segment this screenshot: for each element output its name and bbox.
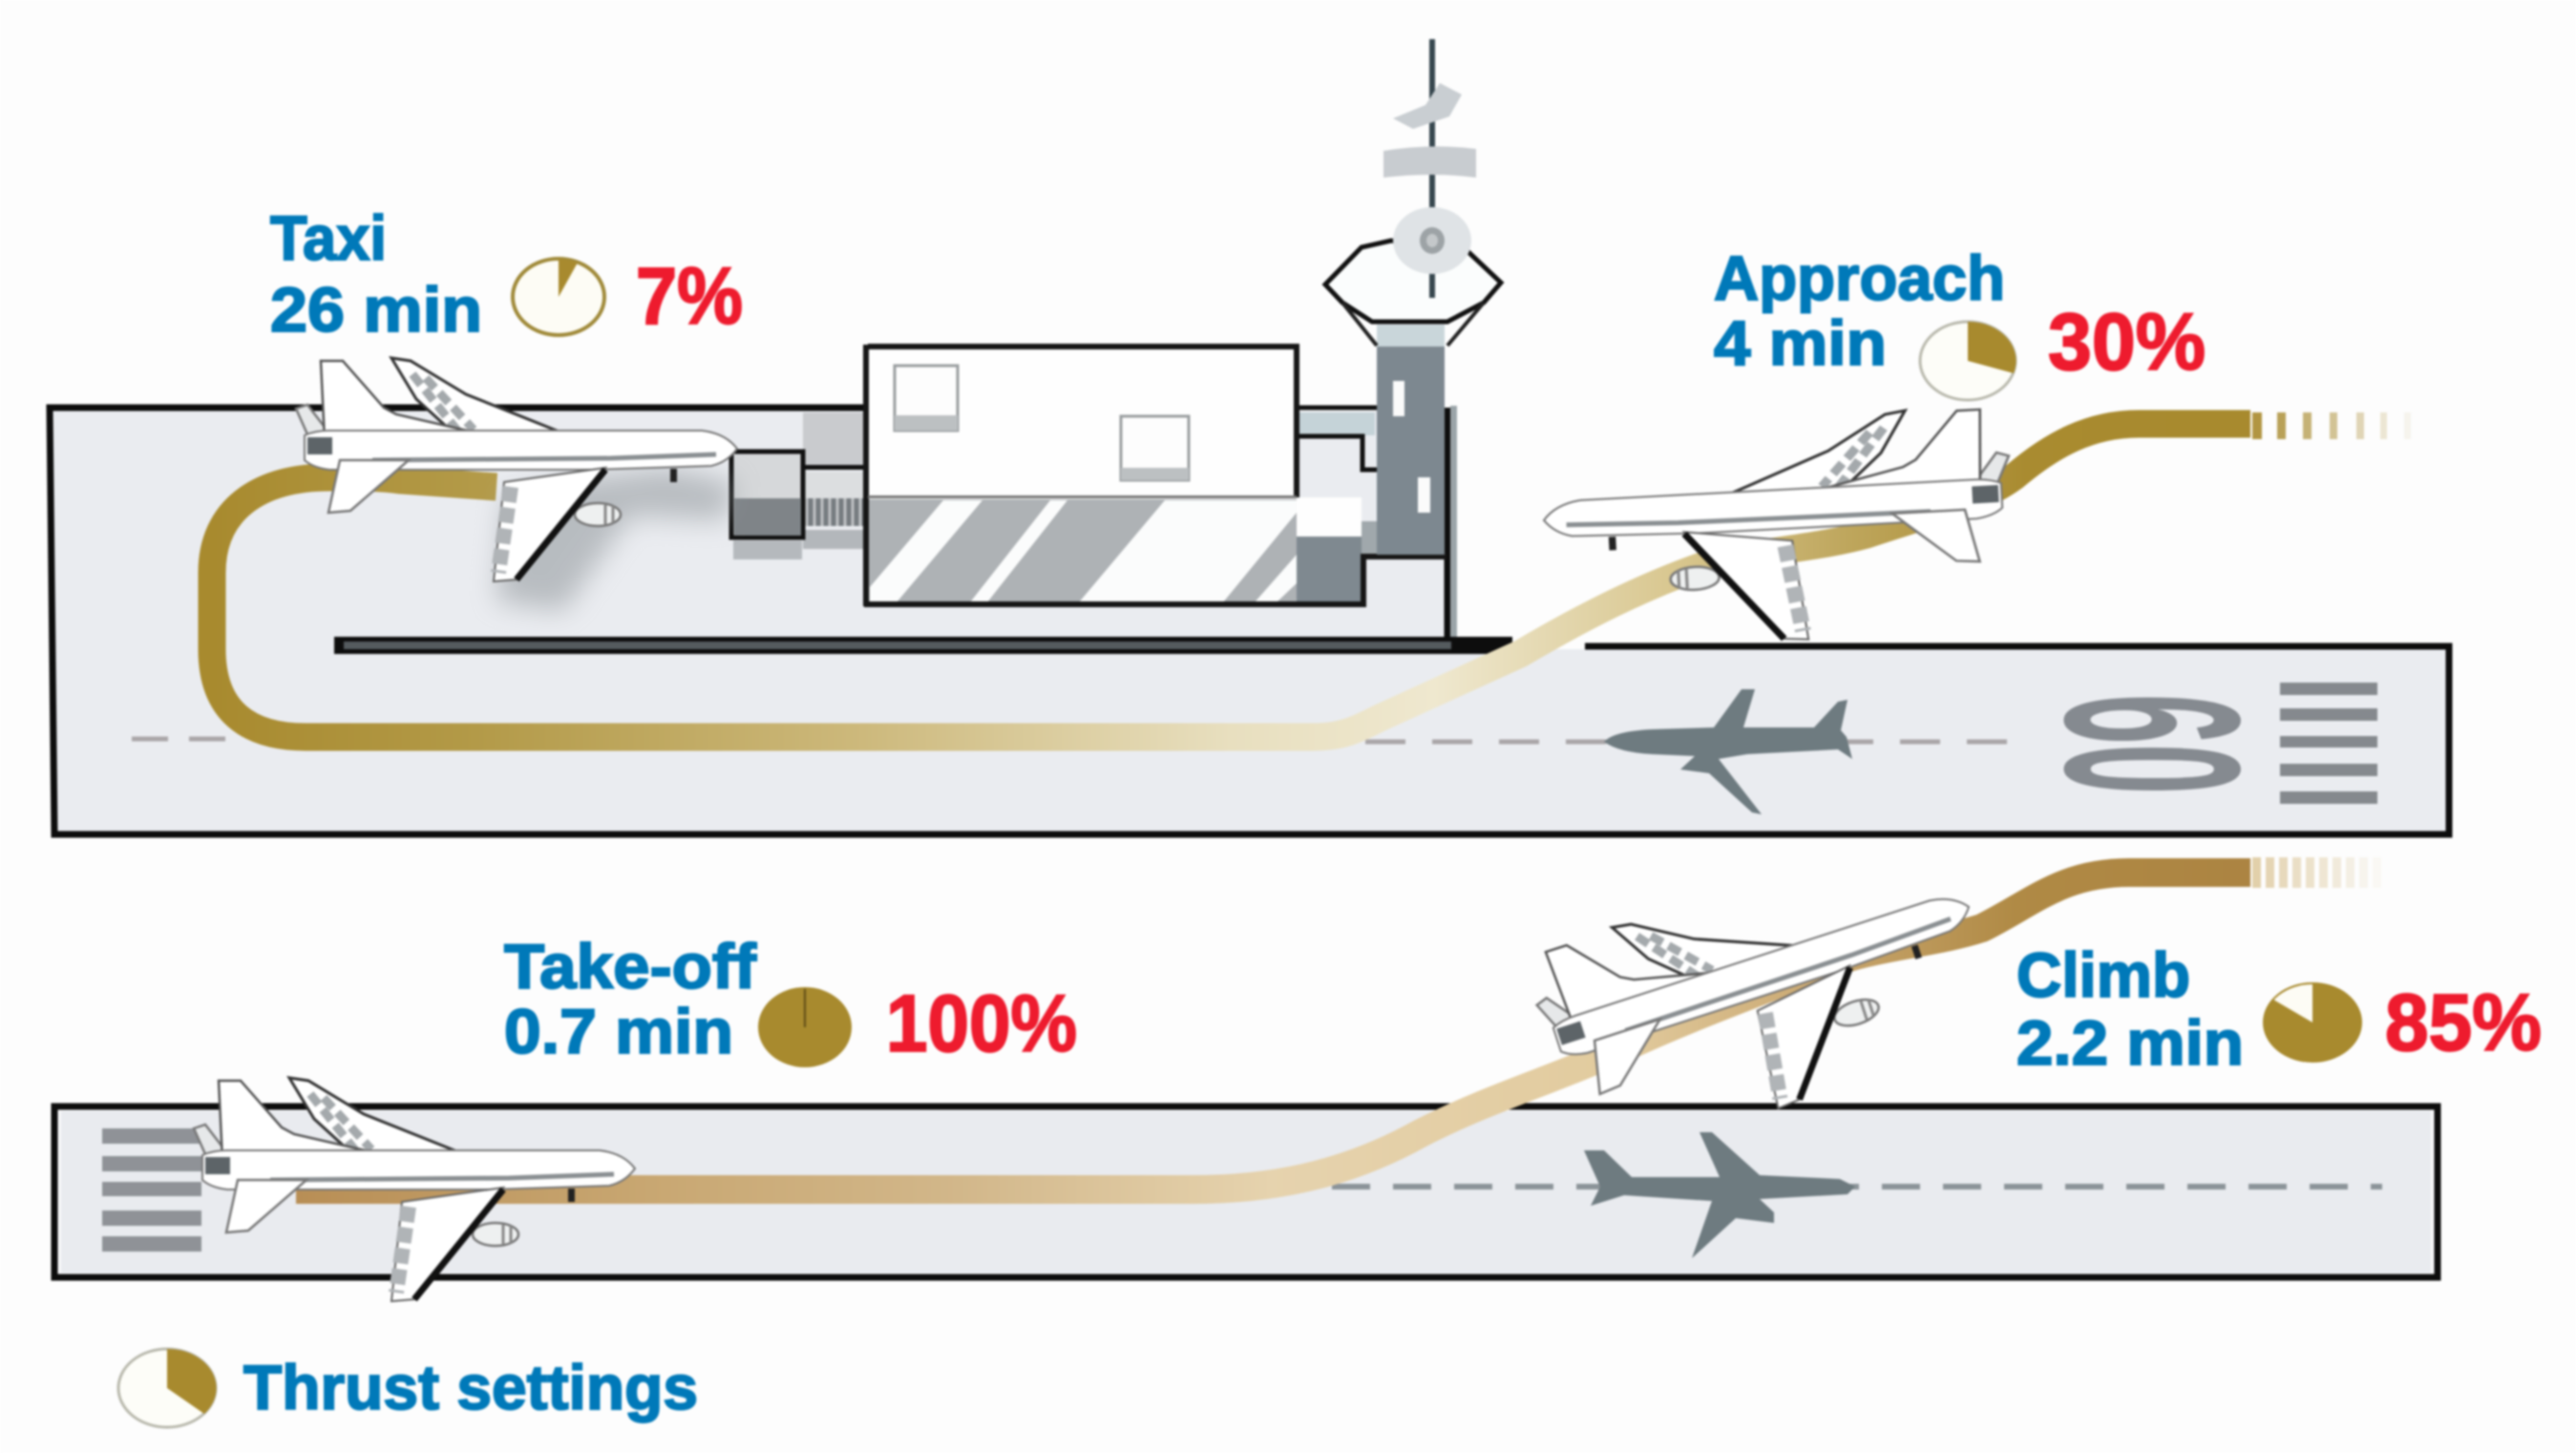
thrust trail: taxi and approach [212,424,2250,737]
threshold stripes (upper runway) [2280,683,2377,804]
control tower [1325,39,1501,555]
label: take-off [504,931,757,1066]
legend: thrust settings [118,1349,698,1427]
label: climb: Climb [2016,939,2190,1010]
service link to tower [1297,408,1377,470]
trail fade dashes: climb [2252,857,2381,888]
label: approach: Approach [1714,242,2005,313]
label: climb [2016,939,2244,1078]
pie: taxi 7% [513,259,604,335]
plane: climb [1521,821,2010,1169]
left jet bridge [731,412,866,559]
plane: approach [1539,406,2017,653]
value: climb thrust: 85% [2385,978,2542,1067]
value: take-off thrust: 100% [886,979,1077,1068]
label: take-off: 0.7 min [504,996,733,1066]
label: take-off: Take-off [504,931,757,1001]
label: climb: 2.2 min [2016,1007,2244,1078]
windows [895,366,1189,480]
legend text: Thrust settings [243,1352,698,1422]
glass facade with reflections [868,499,1297,602]
aircraft ground shadow: take-off [1584,1132,1855,1258]
threshold stripes (lower runway) [102,1128,201,1252]
label: taxi: Taxi [270,202,387,273]
runway centre line dashes (lower) [1332,1184,2382,1190]
label: approach: 4 min [1714,307,1887,378]
building body [866,347,1297,497]
thrust trail: take-off and climb [296,873,2250,1190]
runway centre line dashes (upper) [132,739,2029,742]
trail fade dashes: approach [2252,412,2411,439]
pie: approach 30% [1920,322,2016,400]
label: approach [1714,242,2005,378]
value: taxi thrust: 7% [636,251,743,341]
panel: terminal building [731,345,1446,606]
aircraft ground shadow: landing [1604,689,1852,814]
legend pie [118,1349,217,1427]
plane: taxi [296,358,737,611]
label: taxi: 26 min [270,274,482,345]
panel: upper airport ground and runway [50,406,2449,834]
panel: lower runway [54,1106,2438,1277]
runway designator: 60 [2013,694,2292,794]
value: approach thrust: 30% [2048,297,2206,387]
pie: take-off 100% [758,987,852,1067]
plane: take-off roll [194,1078,635,1301]
label: taxi [270,202,482,345]
pie: climb 85% [2264,983,2361,1062]
